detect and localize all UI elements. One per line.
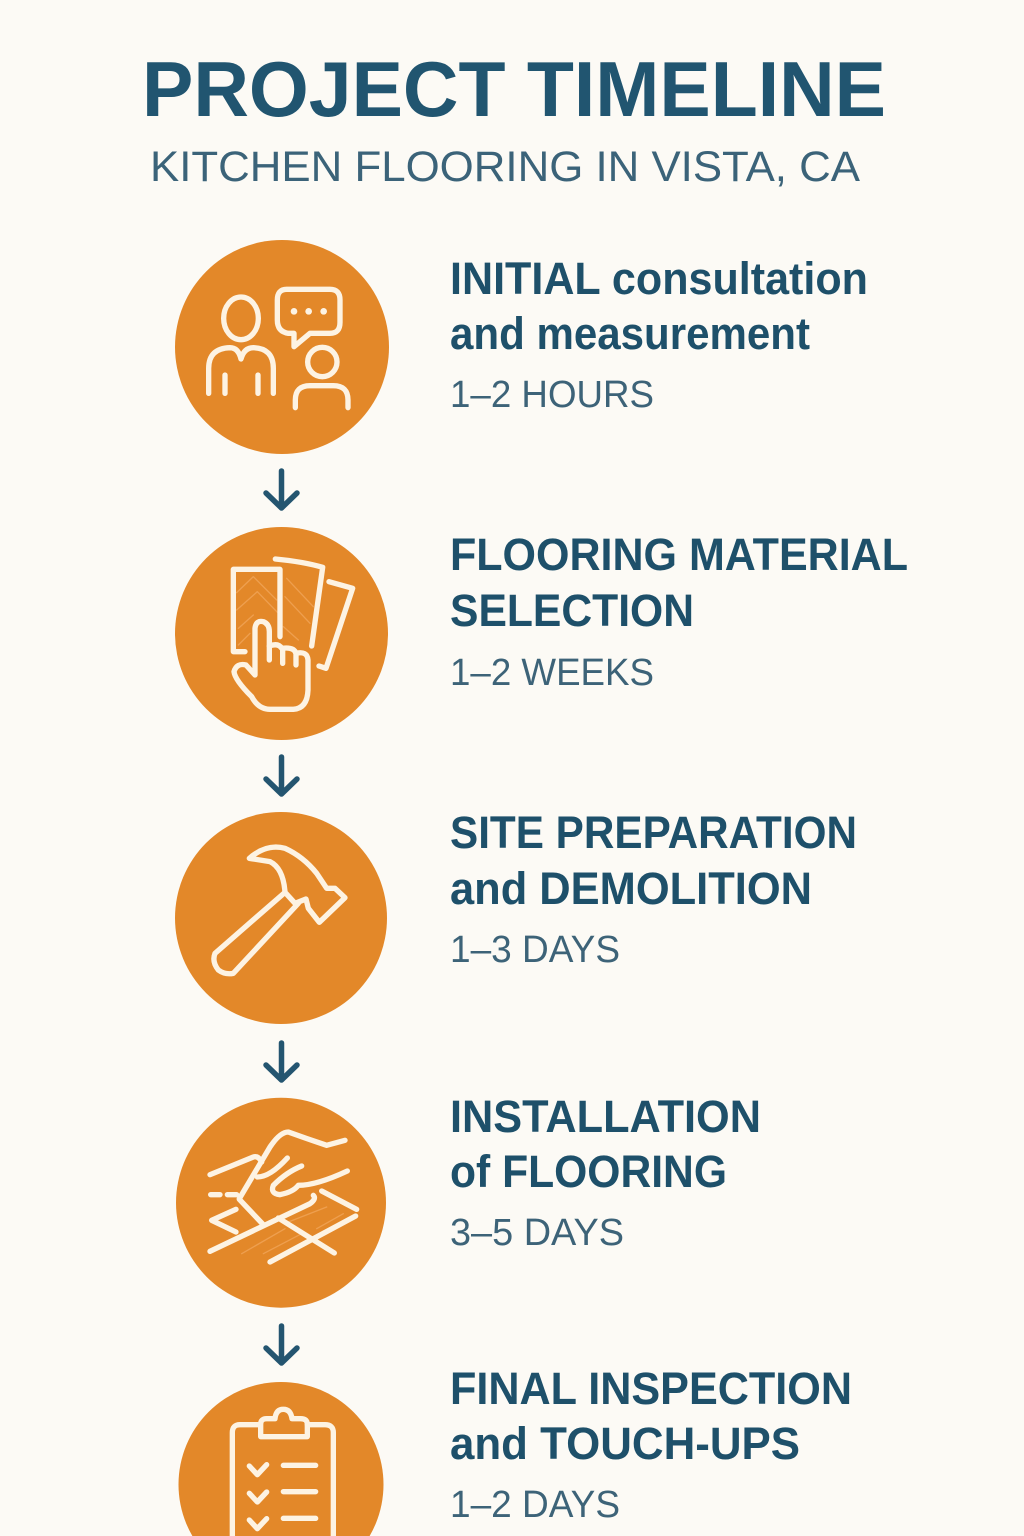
icon: consultation [175,240,389,454]
arrow 2 [266,757,297,794]
step 2 text: SELECTION [450,585,694,636]
step 4 text: INSTALLATION [450,1091,761,1142]
step 5 text: and TOUCH-UPS [450,1418,800,1469]
arrow 1 [266,471,297,508]
step 1 text [450,253,868,416]
step 1 text: 1–2 HOURS [450,374,654,416]
step 3 text: and DEMOLITION [450,863,812,914]
icon: clipboard [178,1382,384,1536]
step 3 text [450,807,857,971]
step 5 text: FINAL INSPECTION [450,1363,852,1414]
step 4 text [450,1091,761,1254]
step 1 text: and measurement [450,308,810,359]
icon: hammer [175,812,387,1024]
step 4 text: 3–5 DAYS [450,1212,624,1254]
arrow 3 [266,1043,297,1080]
arrow 4 [266,1326,297,1363]
icon: installation [176,1098,386,1308]
step 2 text: FLOORING MATERIAL [450,529,908,580]
step 4 text: of FLOORING [450,1146,727,1197]
title: PROJECT TIMELINE [142,45,886,133]
step 2 text [450,529,908,694]
step 3 text: 1–3 DAYS [450,929,620,971]
step 3 text: SITE PREPARATION [450,807,857,858]
step 2 text: 1–2 WEEKS [450,652,654,694]
icon: material selection [175,527,388,740]
step 5 text [450,1363,852,1526]
step 5 text: 1–2 DAYS [450,1484,620,1526]
step 1 text: INITIAL consultation [450,253,868,304]
subtitle: KITCHEN FLOORING IN VISTA, CA [150,143,860,191]
